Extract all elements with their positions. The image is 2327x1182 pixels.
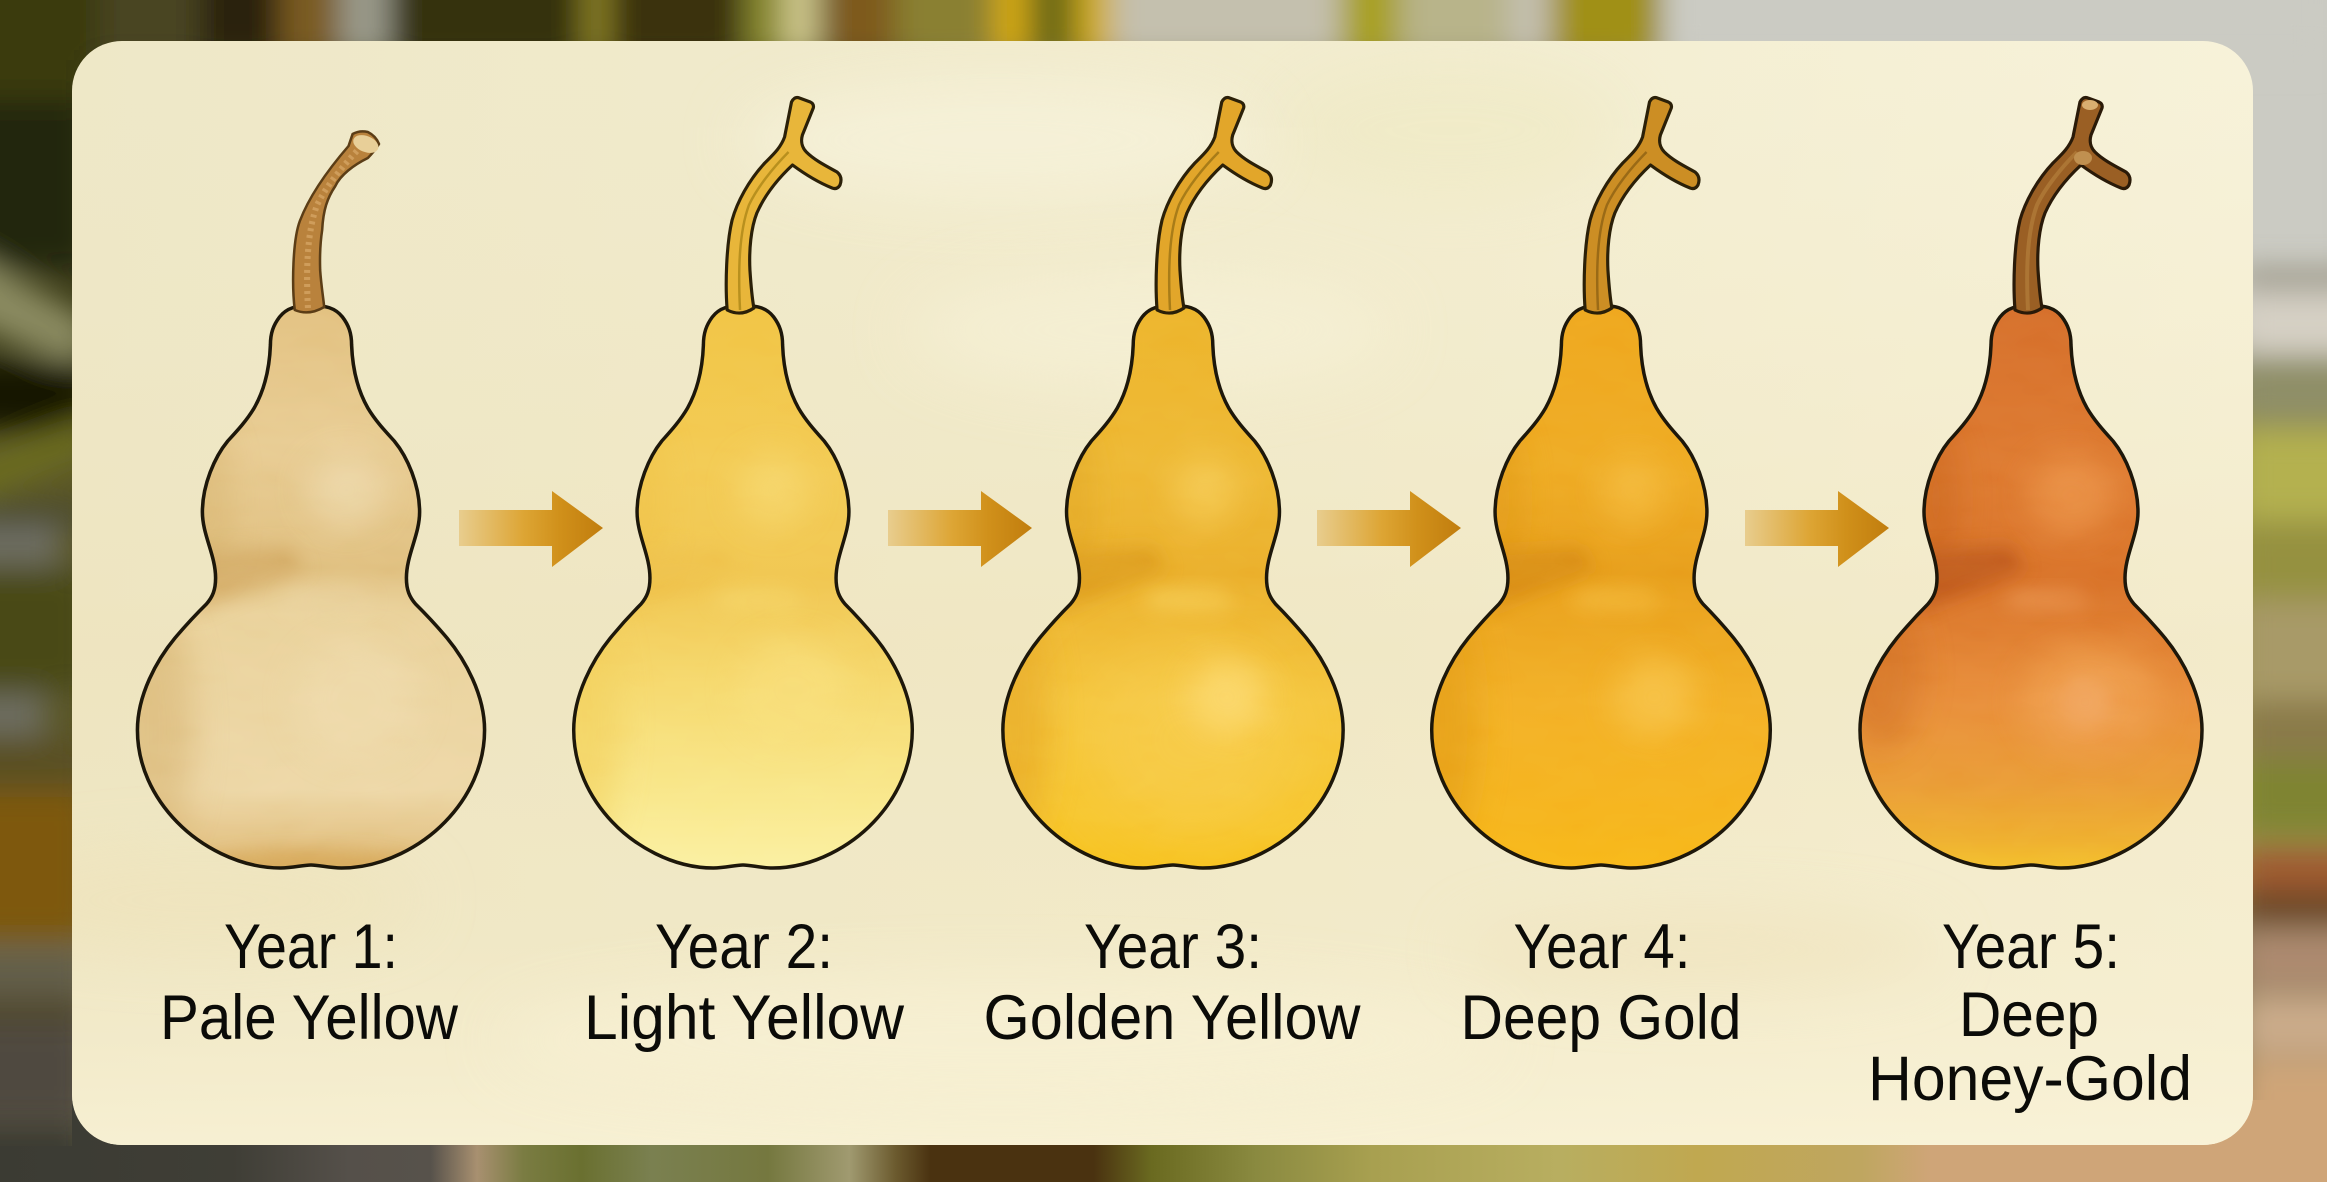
- label: year 1: Pale Yellow: [160, 983, 458, 1053]
- body: year 3 shaded gourd: [1004, 308, 1342, 866]
- arrow: year 2 to year 3: [888, 491, 1032, 567]
- stem: year 1 cut stem: [293, 131, 381, 312]
- label: year 2: Light Yellow: [584, 983, 904, 1053]
- gourd: year 1 pale yellow: [113, 131, 494, 882]
- gourd: year 4 deep gold: [1407, 98, 1779, 876]
- label: year 4: Year 4:: [1514, 912, 1690, 982]
- body: year 4 shaded gourd: [1433, 308, 1769, 866]
- stem: year 5 forked brown stem: [2014, 98, 2130, 313]
- body: year 2 shaded gourd: [575, 308, 910, 866]
- outline: year 5: [1860, 306, 2202, 868]
- arrow: year 4 to year 5: [1745, 491, 1889, 567]
- label: year 3: Year 3:: [1084, 912, 1262, 982]
- label: year 5: Deep: [1959, 980, 2099, 1050]
- label: year 4: Deep Gold: [1460, 983, 1742, 1053]
- label: year 3: [984, 912, 1361, 1053]
- label: year 5: Year 5:: [1942, 912, 2120, 982]
- outline: year 4: [1432, 306, 1770, 868]
- arrow: year 3 to year 4: [1317, 491, 1461, 567]
- gourd: year 2 light yellow: [549, 98, 921, 876]
- label: year 5: Honey-Gold: [1868, 1044, 2192, 1114]
- outline: year 2: [574, 306, 912, 868]
- label: year 2: Year 2:: [655, 912, 833, 982]
- outline: year 1: [137, 306, 485, 868]
- label: year 1: Year 1:: [224, 912, 398, 982]
- label: year 3: Golden Yellow: [984, 983, 1361, 1053]
- gourd: year 3 golden yellow: [978, 98, 1352, 876]
- gourd: year 5 deep honey-gold: [1841, 98, 2211, 876]
- body: year 1 shaded gourd: [139, 308, 483, 866]
- label: year 2: [584, 912, 904, 1053]
- arrow: year 1 to year 2: [459, 491, 603, 567]
- outline: year 3: [1003, 306, 1343, 868]
- stem: year 4 forked stem: [1584, 98, 1699, 313]
- body: year 5 shaded gourd: [1862, 308, 2200, 866]
- label: year 5: [1868, 912, 2192, 1114]
- stem: year 2 forked stem: [726, 98, 841, 313]
- label: year 1: [160, 912, 458, 1053]
- label: year 4: [1460, 912, 1742, 1053]
- stem: year 3 forked stem: [1156, 98, 1272, 313]
